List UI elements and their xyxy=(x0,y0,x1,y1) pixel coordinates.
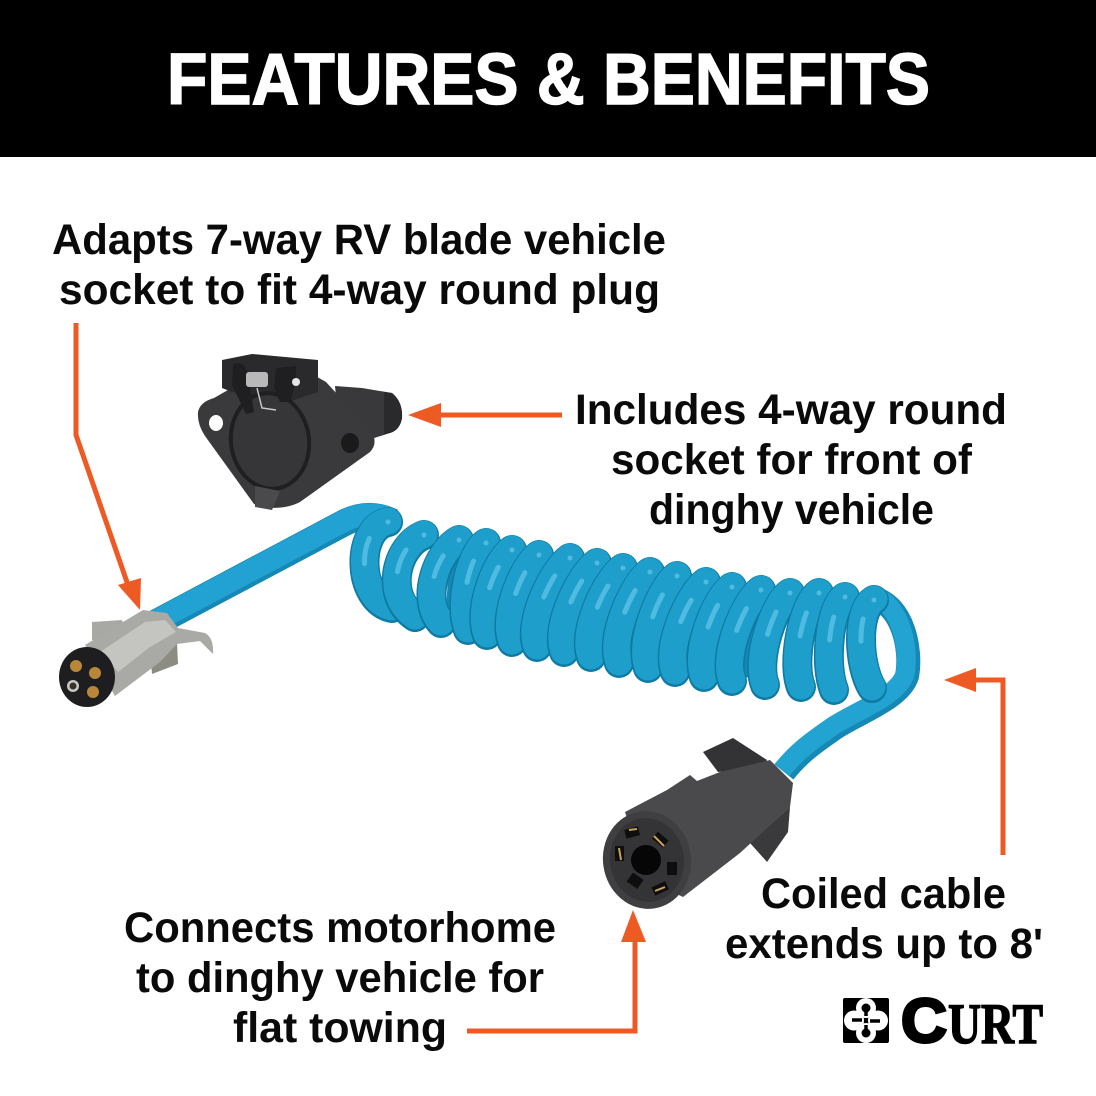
logo wordmark: C xyxy=(901,987,947,1056)
plug metal body xyxy=(85,610,213,696)
plug gold pins xyxy=(70,660,82,672)
header banner xyxy=(0,0,1096,157)
callout text: includes 4-way socket xyxy=(575,386,1007,534)
callout text: coiled cable xyxy=(725,870,1043,968)
socket mounting holes xyxy=(209,415,223,431)
7-way socket connector xyxy=(198,354,402,510)
CURT logo xyxy=(843,987,1043,1056)
plug center hole xyxy=(631,845,661,875)
callout text: adapts 7-way: socket to fit 4-way round plug xyxy=(59,266,660,314)
plug main body xyxy=(625,760,793,897)
callout text: connects motorhome: flat towing xyxy=(233,1004,447,1052)
plug face xyxy=(597,805,697,915)
logo emblem xyxy=(843,998,889,1043)
socket tab xyxy=(255,486,280,510)
callout text: includes 4-way socket: dinghy vehicle xyxy=(649,486,934,534)
callout text: includes 4-way socket: socket for front of xyxy=(611,436,973,484)
socket round cover xyxy=(222,386,318,496)
callout text: connects motorhome: Connects motorhome xyxy=(124,904,556,952)
socket spring xyxy=(246,372,268,387)
plug top clip xyxy=(703,738,767,772)
callout text: coiled cable: extends up to 8' xyxy=(725,920,1043,968)
plug lower lug xyxy=(150,642,178,674)
CURT logo: URT xyxy=(948,993,1043,1056)
plug terminals xyxy=(624,826,640,839)
arrow: to 7-way plug xyxy=(467,910,646,1031)
callout text: adapts 7-way: Adapts 7-way RV blade vehicle xyxy=(52,216,666,264)
callout text: includes 4-way socket: Includes 4-way round xyxy=(575,386,1007,434)
socket hinge arm xyxy=(232,363,254,414)
arrow: to 4-way socket xyxy=(408,403,562,427)
4-way round plug xyxy=(59,610,213,707)
plug rear fin xyxy=(92,620,130,645)
socket flange xyxy=(198,374,375,508)
arrow: to coiled cable xyxy=(944,668,1003,855)
coiled blue cable xyxy=(150,514,908,772)
socket rear barrel xyxy=(335,386,402,440)
title: FEATURES & BENEFITS xyxy=(167,40,930,120)
callout text: coiled cable: Coiled cable xyxy=(761,870,1006,918)
socket hinge bracket xyxy=(222,354,318,402)
plug bottom clip xyxy=(750,807,790,862)
callout text: connects motorhome: to dinghy vehicle for xyxy=(136,954,544,1002)
plug silver pin xyxy=(67,680,79,692)
callout text: adapts 7-way xyxy=(52,216,666,314)
callout text: connects motorhome xyxy=(124,904,556,1052)
arrow: to 4-way plug xyxy=(76,323,141,610)
7-way plug connector xyxy=(597,738,793,915)
plug face xyxy=(59,647,115,707)
